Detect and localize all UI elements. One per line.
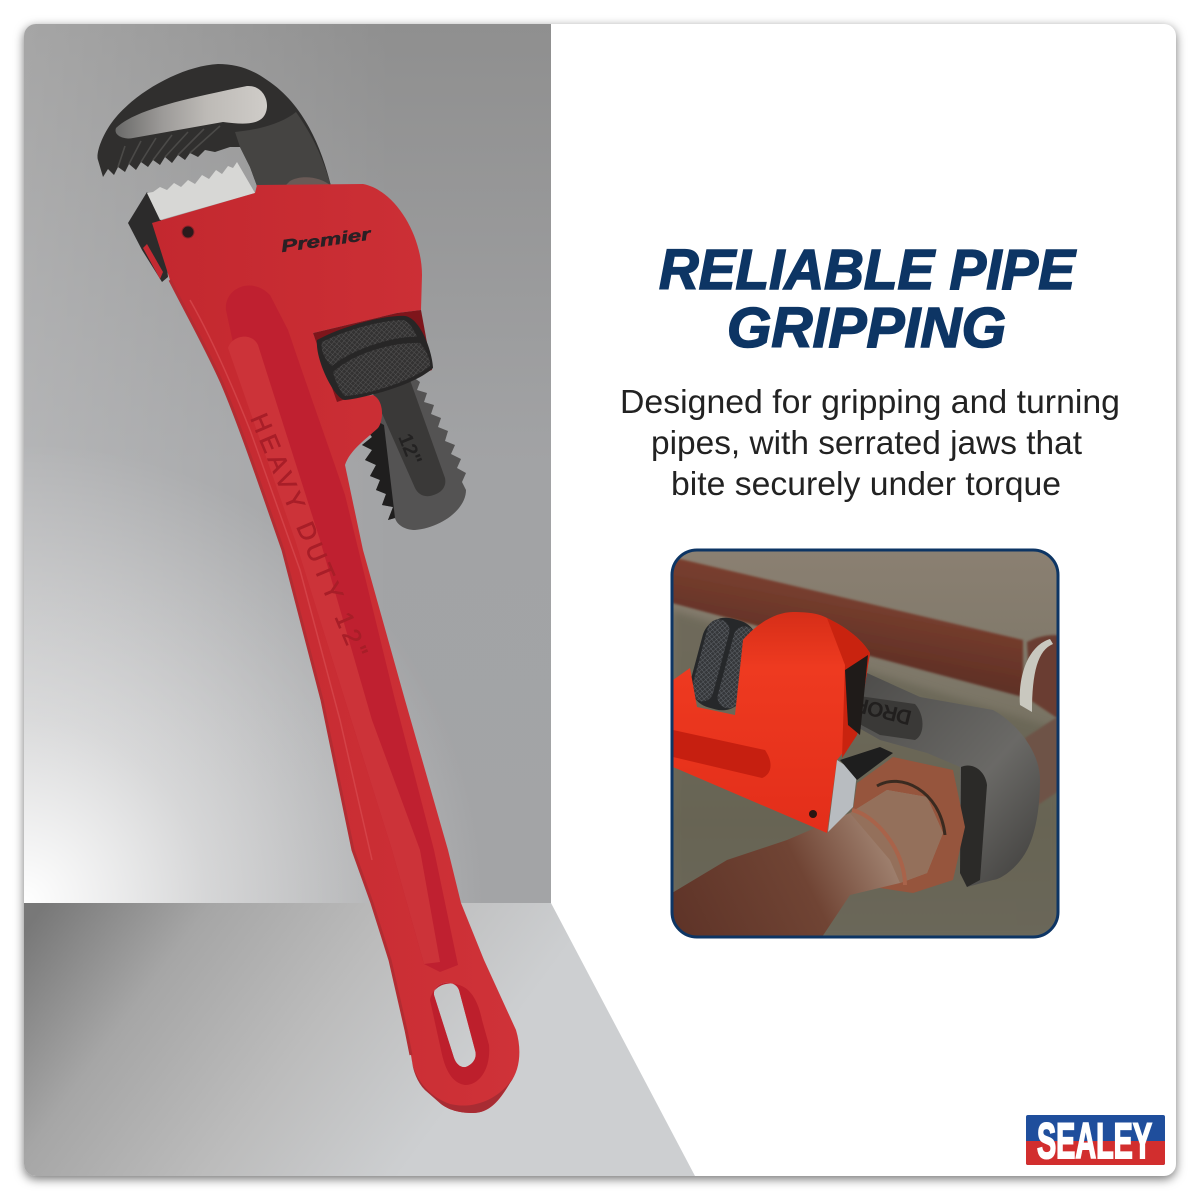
heading: GRIPPING <box>727 296 1006 360</box>
wrench sliding jaw block <box>128 162 255 282</box>
red wrench head <box>673 612 870 833</box>
handle shading <box>170 280 513 1113</box>
cable tie <box>1020 639 1053 712</box>
photo border <box>672 550 1058 937</box>
jaw stamped text: DROP <box>852 692 914 729</box>
heading: RELIABLE PIPE <box>659 238 1077 302</box>
description text: pipes, with serrated jaws that <box>651 424 1082 461</box>
screw size marking: 12" <box>393 431 426 468</box>
description text <box>620 383 1120 502</box>
panel: studio backdrop <box>24 24 695 1176</box>
grey hook jaw <box>847 670 1040 887</box>
wrench red body and handle <box>152 184 519 1113</box>
wrench adjusting screw <box>362 377 466 530</box>
photo: wrench gripping a rusty pipe <box>670 548 1060 940</box>
head rivet <box>182 226 194 238</box>
heading <box>659 238 1077 360</box>
upper rusty pipe <box>672 557 1023 697</box>
rusty pipe and hex fitting <box>850 757 965 893</box>
description text: Designed for gripping and turning <box>620 383 1120 420</box>
wrench hook jaw <box>98 64 331 186</box>
wall background <box>24 24 551 903</box>
brand mark on head: Premier <box>280 224 374 256</box>
silver and dark jaw teeth <box>828 760 857 832</box>
illustration: red pipe wrench <box>98 64 519 1113</box>
knurled nut in photo <box>692 618 753 710</box>
knurled adjusting nut <box>313 310 433 402</box>
handle embossed text: HEAVY DUTY 12" <box>244 409 373 662</box>
description text: bite securely under torque <box>671 465 1061 502</box>
floor <box>24 903 695 1176</box>
